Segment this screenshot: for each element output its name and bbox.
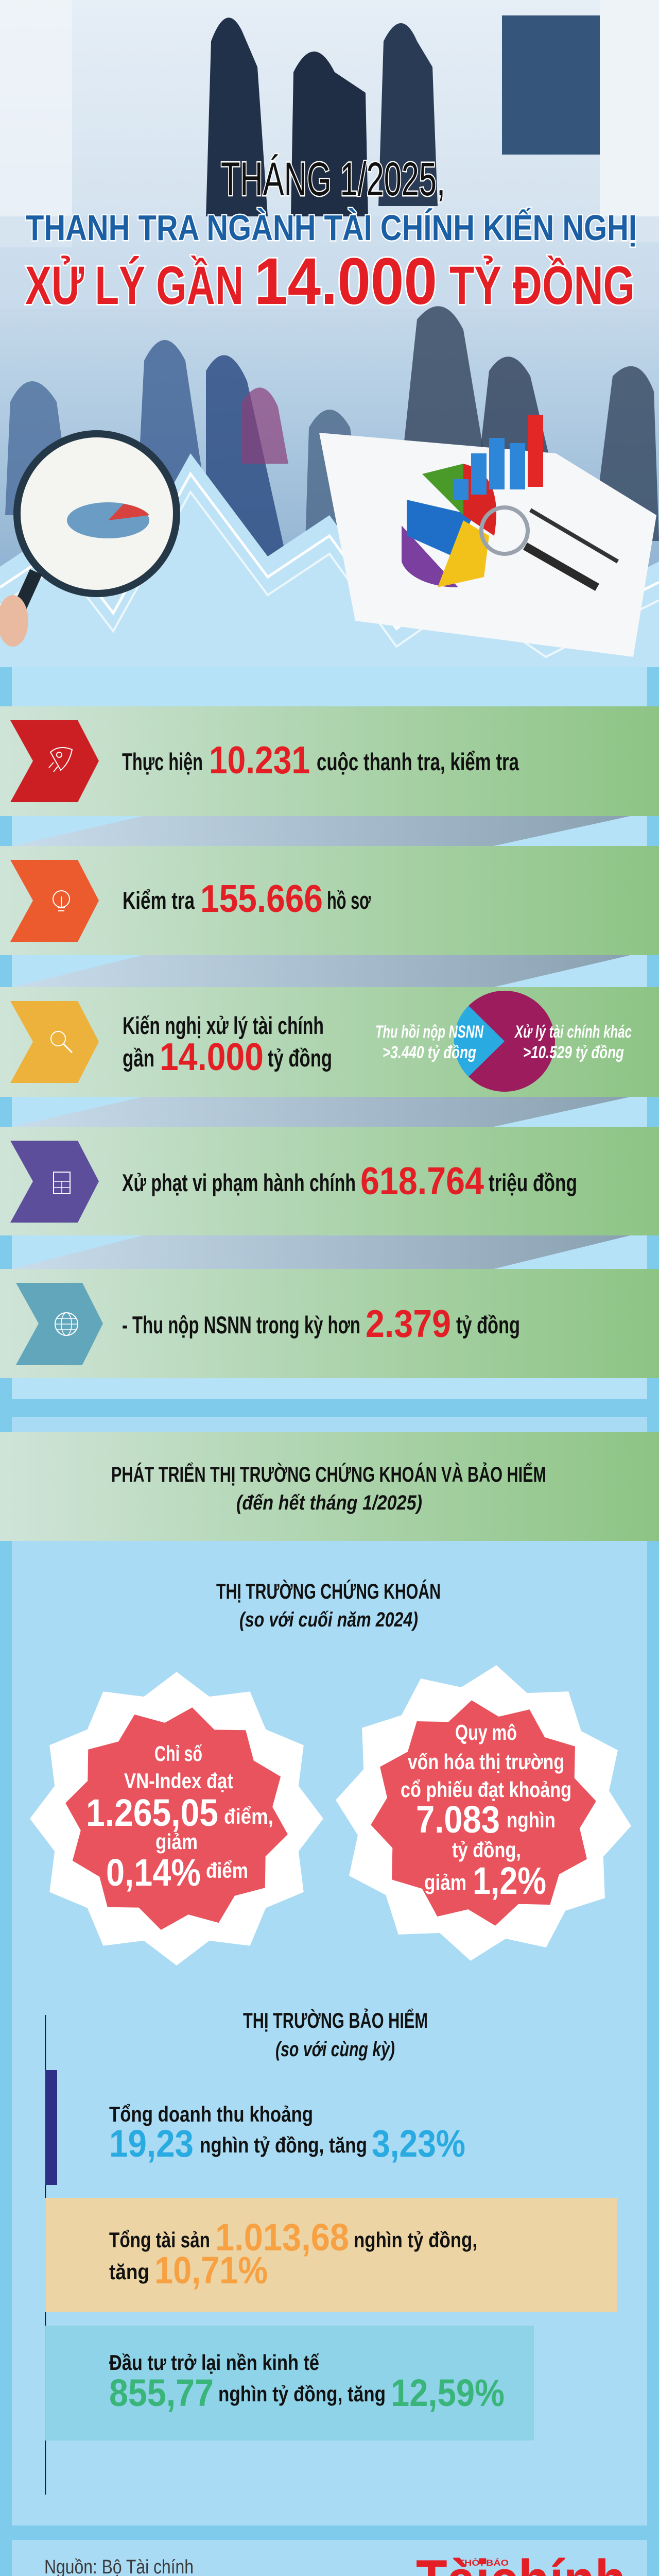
- panel: band 4 administrative fines: 618.764: [360, 1159, 484, 1202]
- title: THÁNG 1/2025,: [221, 153, 445, 206]
- bar: total assets: tăng: [109, 2260, 149, 2284]
- panel: band 1 inspections: Thực hiện: [122, 748, 203, 775]
- panel: band 2 records: Kiểm tra: [123, 887, 195, 914]
- panel: band 2 records: hồ sơ: [327, 887, 371, 914]
- bar: total assets: [45, 2198, 617, 2312]
- heading: stock market: (so với cuối năm 2024): [239, 1608, 418, 1631]
- pie chart: >10.529 tỷ đồng: [523, 1043, 624, 1062]
- panel: band 1 inspections: 10.231: [209, 738, 310, 782]
- icon: rocket chevron: [10, 720, 99, 802]
- panel: band 5 state budget: 2.379: [366, 1302, 451, 1345]
- hero image: [0, 0, 659, 667]
- bar: total revenue: nghìn tỷ đồng, tăng: [200, 2133, 367, 2157]
- heading: insurance market: (so với cùng kỳ): [275, 2038, 395, 2061]
- panel: band 3 financial handling: tỷ đồng: [268, 1044, 332, 1072]
- panel: band 4 administrative fines: Xử phạt vi phạm hành chính: [122, 1169, 356, 1196]
- badge: market capitalization: tỷ đồng,: [452, 1838, 521, 1862]
- panel: band 2 records: 155.666: [200, 877, 323, 920]
- heading: stock market: THỊ TRƯỜNG CHỨNG KHOÁN: [216, 1579, 441, 1603]
- bar: reinvestment: 12,59%: [391, 2371, 505, 2414]
- panel: band 1 inspections: [0, 706, 659, 816]
- bar: reinvestment: Đầu tư trở lại nền kinh tế: [109, 2350, 320, 2375]
- title: 14.000: [254, 245, 437, 318]
- icon: bulb chevron: [10, 860, 99, 942]
- badge: VN-Index: Chỉ số: [154, 1741, 202, 1766]
- badge: VN-Index: 0,14%: [106, 1851, 201, 1894]
- badge: VN-Index: VN-Index đạt: [124, 1769, 233, 1793]
- bar: total assets: nghìn tỷ đồng,: [354, 2228, 477, 2252]
- bar: total revenue: 19,23: [109, 2122, 194, 2165]
- badge: VN-Index: giảm: [155, 1829, 198, 1854]
- icon: magnifier chevron: [10, 1001, 99, 1083]
- badge: VN-Index: [30, 1672, 323, 1965]
- bar: reinvestment: nghìn tỷ đồng, tăng: [218, 2382, 386, 2406]
- panel: band 3 financial handling: Kiến nghị xử lý tài chính: [123, 1012, 324, 1039]
- badge: market capitalization: nghìn: [507, 1808, 556, 1832]
- pie chart: [375, 991, 632, 1092]
- badge: market capitalization: giảm: [424, 1870, 466, 1894]
- section header: market development: [0, 1432, 659, 1541]
- bar: total revenue: 3,23%: [372, 2122, 465, 2165]
- bar: reinvestment: 855,77: [109, 2371, 214, 2414]
- pie chart: Thu hồi nộp NSNN: [375, 1022, 484, 1042]
- heading: insurance market: THỊ TRƯỜNG BẢO HIỂM: [243, 2008, 428, 2032]
- panel: band 5 state budget: [0, 1269, 659, 1378]
- icon: calculator chevron: [10, 1141, 99, 1223]
- badge: VN-Index: điểm: [206, 1858, 248, 1883]
- bar: total assets: 1.013,68: [215, 2216, 349, 2259]
- heading: insurance market: [243, 2008, 428, 2061]
- badge: market capitalization: vốn hóa thị trường: [408, 1750, 564, 1774]
- footer: [12, 2540, 647, 2576]
- magnifier: [0, 434, 177, 647]
- bar: reinvestment: [45, 2326, 534, 2441]
- panel: band 3 financial handling: 14.000: [160, 1035, 264, 1078]
- panel: band 3 financial handling: gần: [123, 1044, 154, 1072]
- panel: band 4 administrative fines: triệu đồng: [489, 1169, 577, 1196]
- heading: stock market: [216, 1579, 441, 1631]
- bar: total revenue: [45, 2070, 465, 2185]
- panel: band 5 state budget: - Thu nộp NSNN trong kỳ hơn: [122, 1311, 360, 1338]
- paper with chart: [319, 433, 656, 657]
- panel: band 2 records: [0, 846, 659, 955]
- badge: VN-Index: điểm,: [224, 1804, 273, 1828]
- badge: market capitalization: cổ phiếu đạt khoảng: [401, 1777, 571, 1802]
- title: XỬ LÝ GẦN: [25, 255, 244, 316]
- badge: market capitalization: [323, 1652, 644, 1974]
- badge: market capitalization: 1,2%: [473, 1859, 546, 1902]
- badge: market capitalization: Quy mô: [455, 1720, 517, 1744]
- section header: market development: (đến hết tháng 1/2025): [236, 1492, 422, 1514]
- panel: band 4 administrative fines: [0, 1127, 659, 1235]
- panel: band 1 inspections: cuộc thanh tra, kiểm tra: [317, 748, 519, 775]
- panel: band 3 financial handling: [0, 987, 659, 1097]
- bar: total assets: 10,71%: [154, 2249, 268, 2292]
- pie chart: >3.440 tỷ đồng: [383, 1043, 476, 1062]
- icon: globe chevron: [16, 1283, 103, 1365]
- badge: market capitalization: 7.083: [416, 1798, 500, 1841]
- logo: THỜI BÁO: [458, 2558, 509, 2568]
- title: [25, 153, 637, 318]
- bar: total assets: Tổng tài sản: [109, 2228, 210, 2252]
- bar: total revenue: Tổng doanh thu khoảng: [109, 2102, 313, 2126]
- panel: band 5 state budget: tỷ đồng: [456, 1311, 520, 1338]
- badge: VN-Index: 1.265,05: [86, 1791, 218, 1834]
